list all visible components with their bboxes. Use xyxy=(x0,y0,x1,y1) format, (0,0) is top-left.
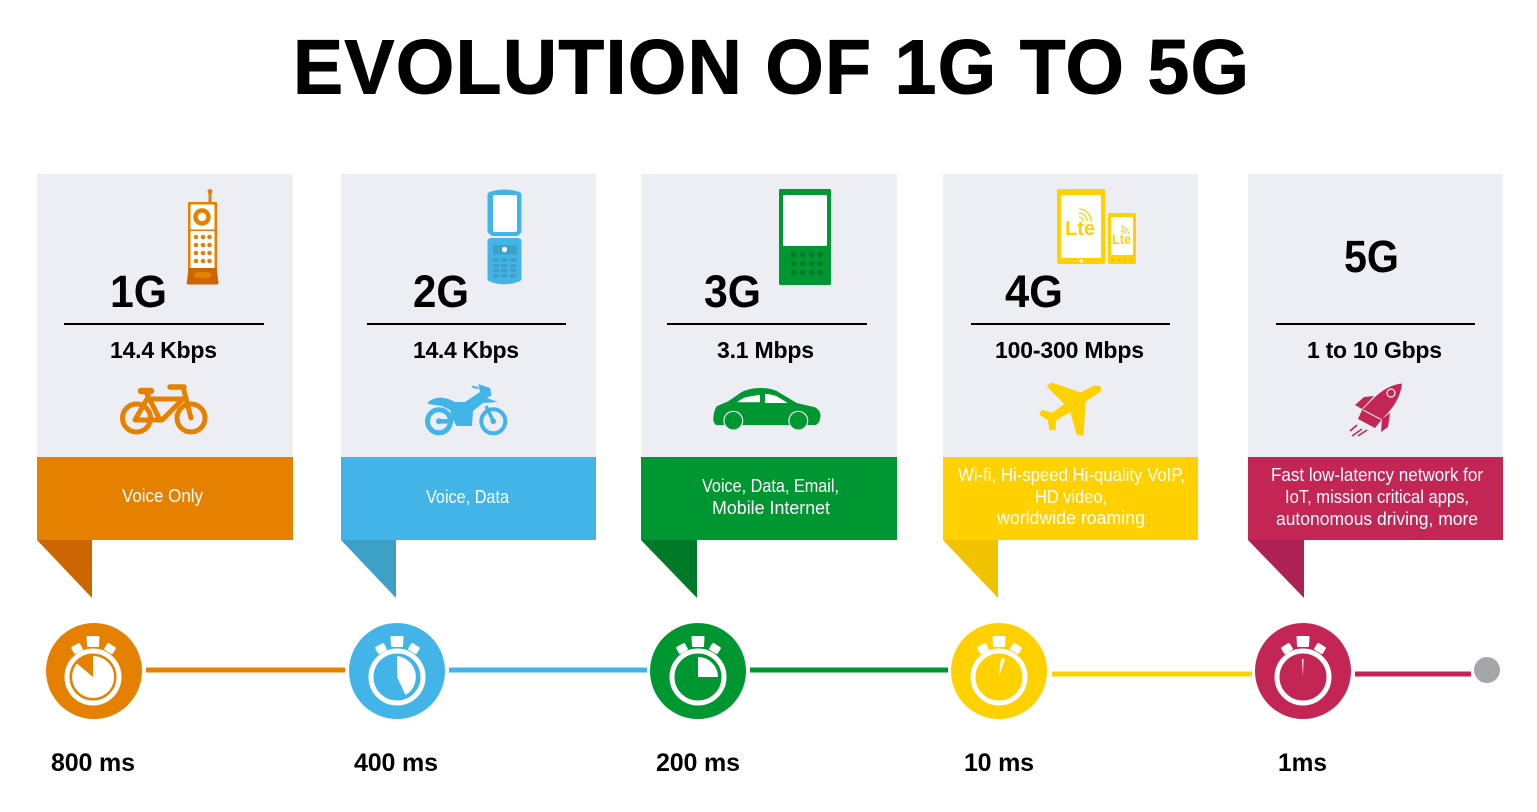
stopwatch icon xyxy=(1255,623,1351,719)
banner: 5G features: autonomous driving, more xyxy=(1276,509,1478,529)
banner: 4G features: HD video, xyxy=(1035,487,1107,507)
connector xyxy=(1355,672,1471,676)
connector xyxy=(146,668,345,672)
banner: 4G features: Wi-fi, Hi-speed Hi-quality VoIP, xyxy=(958,465,1185,485)
heading: 4G: 4G xyxy=(1005,266,1063,317)
connector xyxy=(750,668,948,672)
title: EVOLUTION OF 1G TO 5G xyxy=(293,25,1249,111)
banner: 5G features xyxy=(1248,457,1503,540)
banner: Voice, Data, Email, Mobile Internet: Mobile Internet xyxy=(712,498,830,518)
stopwatch icon xyxy=(650,623,746,719)
icon: LTE tablet and phone xyxy=(1057,189,1136,264)
panel background xyxy=(37,174,293,457)
speed: 14.4 Kbps xyxy=(110,337,217,363)
icon: rocket xyxy=(1350,384,1402,436)
connector xyxy=(1052,672,1252,676)
latency label: 1ms xyxy=(1278,749,1327,777)
heading: 5G: 5G xyxy=(1344,231,1399,282)
panel background xyxy=(943,174,1198,457)
panel: 2G xyxy=(341,174,596,598)
banner tail xyxy=(1248,540,1304,598)
banner: Voice, Data xyxy=(341,457,596,540)
icon: airplane xyxy=(1040,383,1101,435)
latency label: 200 ms xyxy=(656,749,740,777)
banner tail xyxy=(37,540,92,598)
latency label: 800 ms xyxy=(51,749,135,777)
banner: Voice, Data, Email, Mobile Internet xyxy=(641,457,897,540)
banner: Voice, Data, Email, Mobile Internet: Voice, Data, Email, xyxy=(702,476,839,496)
timeline: 800 ms xyxy=(46,623,345,777)
heading: 3G: 3G xyxy=(704,266,761,317)
timeline: 10 ms xyxy=(951,623,1252,777)
panel: 4G xyxy=(943,174,1198,598)
stopwatch icon xyxy=(951,623,1047,719)
icon: LTE tablet and phone: Lte xyxy=(1112,231,1131,247)
banner: 4G features: worldwide roaming xyxy=(996,508,1145,528)
timeline: 200 ms xyxy=(650,623,948,777)
stopwatch icon xyxy=(46,623,142,719)
panel: 5G xyxy=(1248,174,1503,598)
panel: 3G xyxy=(641,174,897,598)
icon: brick phone xyxy=(187,189,218,284)
banner: Voice, Data: Voice, Data xyxy=(426,487,510,507)
heading: 1G: 1G xyxy=(110,266,167,317)
timeline: 400 ms xyxy=(349,623,647,777)
icon: LTE tablet and phone: Lte xyxy=(1065,218,1095,240)
panel: 1G xyxy=(37,174,293,598)
panel background xyxy=(641,174,897,457)
icon: flip phone xyxy=(488,190,522,284)
banner tail xyxy=(641,540,697,598)
icon: car xyxy=(713,388,820,431)
timeline end dot xyxy=(1474,657,1500,683)
banner tail xyxy=(341,540,396,598)
latency label: 400 ms xyxy=(354,749,438,777)
icon: motorcycle xyxy=(428,384,505,433)
banner: Voice Only: Voice Only xyxy=(122,486,203,506)
banner: 5G features: Fast low-latency network for xyxy=(1271,465,1483,485)
icon: bicycle xyxy=(122,387,205,432)
heading: 2G: 2G xyxy=(413,266,469,317)
speed: 1 to 10 Gbps xyxy=(1307,337,1442,363)
panel background xyxy=(1248,174,1503,457)
speed: 100-300 Mbps xyxy=(995,337,1144,363)
speed: 14.4 Kbps xyxy=(413,337,519,363)
icon: smartphone xyxy=(779,189,831,285)
latency label: 10 ms xyxy=(964,749,1034,777)
banner tail xyxy=(943,540,998,598)
timeline: 1 ms xyxy=(1255,623,1471,777)
banner: Voice Only xyxy=(37,457,293,540)
banner: 5G features: IoT, mission critical apps, xyxy=(1285,487,1469,507)
stopwatch icon xyxy=(349,623,445,719)
panel background xyxy=(341,174,596,457)
speed: 3.1 Mbps xyxy=(717,337,814,363)
banner: 4G features xyxy=(943,457,1198,540)
connector xyxy=(449,668,647,672)
